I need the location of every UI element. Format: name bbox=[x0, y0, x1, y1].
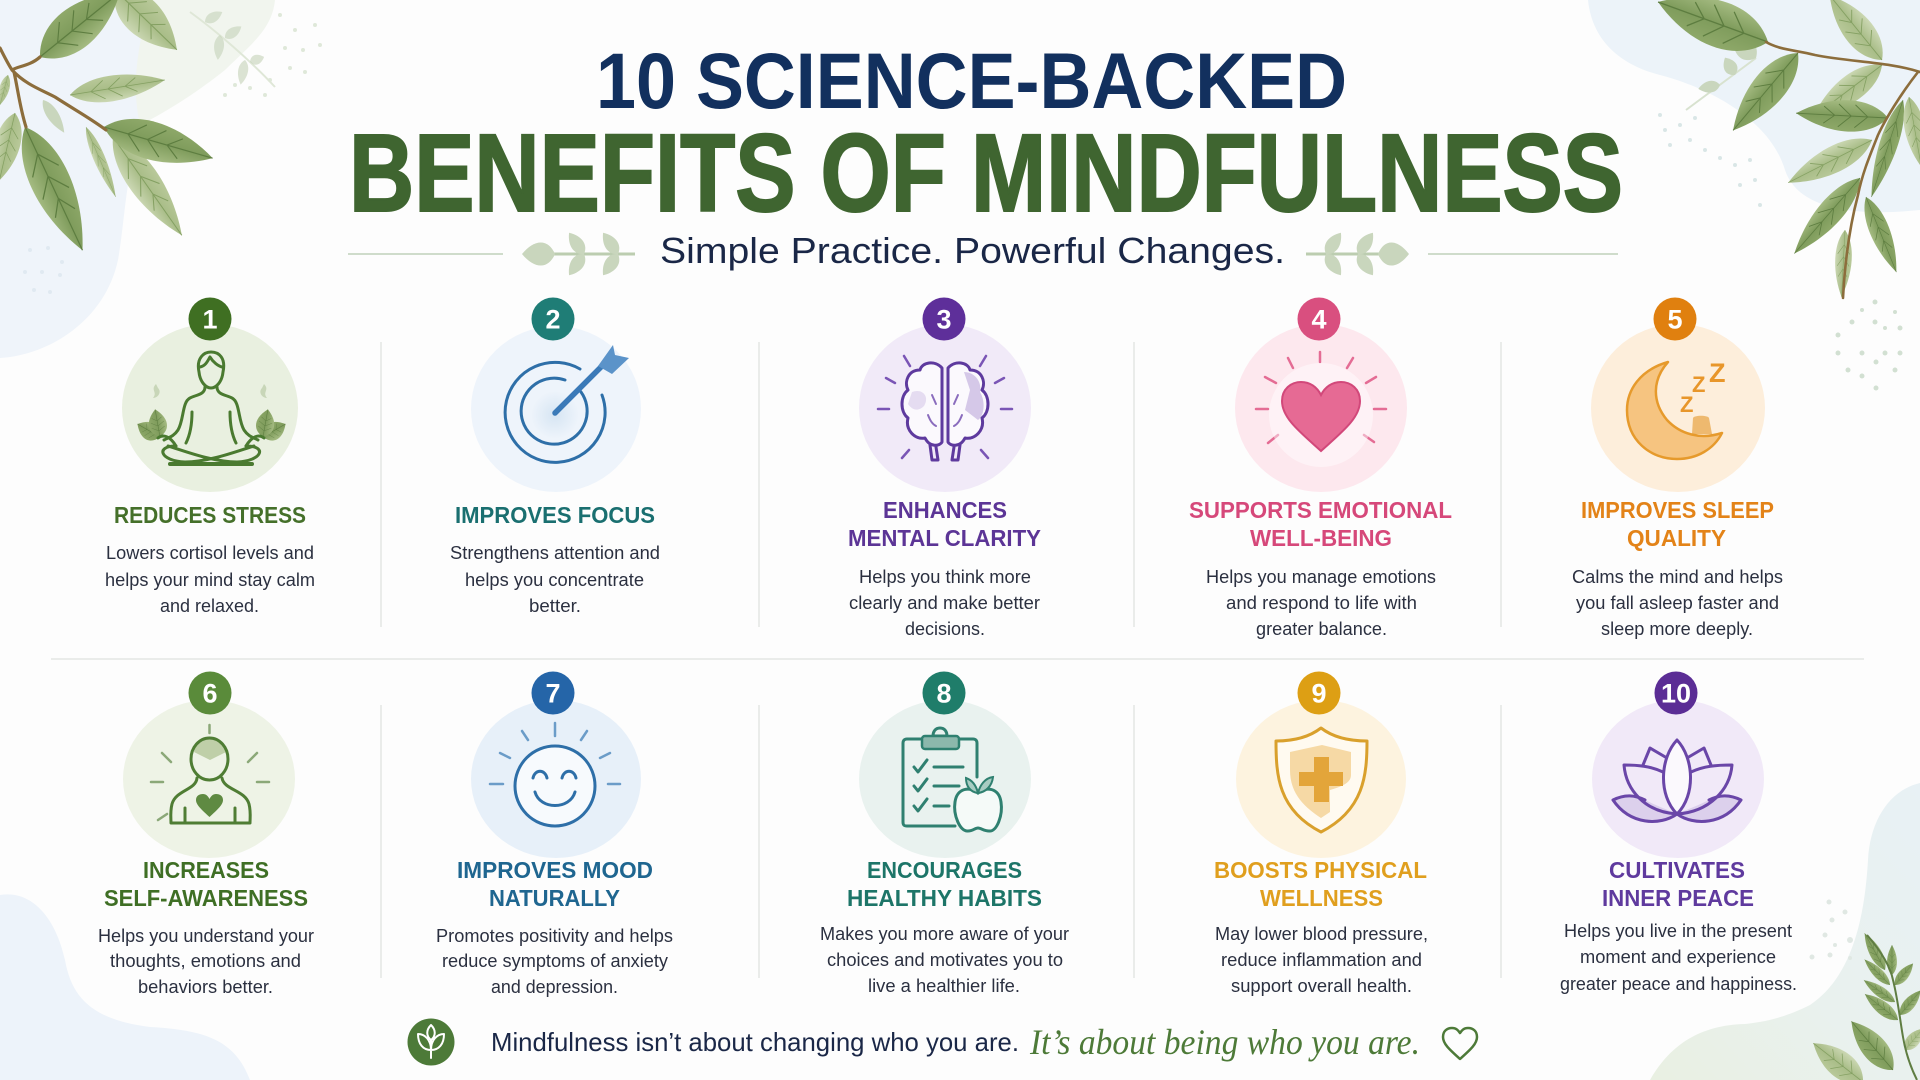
description: Helps you think more bbox=[859, 566, 1031, 587]
heading: NATURALLY bbox=[489, 885, 620, 911]
description bbox=[1206, 566, 1436, 639]
card 8: encourages healthy habits bbox=[820, 672, 1069, 996]
card 9: boosts physical wellness bbox=[1214, 672, 1428, 996]
title: 10 SCIENCE-BACKED bbox=[596, 36, 1347, 125]
heading: WELLNESS bbox=[1260, 885, 1383, 911]
description: live a healthier life. bbox=[868, 975, 1020, 996]
heading bbox=[1602, 857, 1754, 911]
card 10: cultivates inner peace bbox=[1560, 672, 1797, 994]
description: thoughts, emotions and bbox=[110, 950, 301, 971]
heading: REDUCES STRESS bbox=[114, 502, 306, 528]
card 5: improves sleep quality bbox=[1572, 298, 1783, 639]
top-left leaf branch bbox=[0, 0, 218, 259]
description: helps your mind stay calm bbox=[105, 569, 315, 590]
heading: HEALTHY HABITS bbox=[847, 885, 1042, 911]
subtitle with sprigs bbox=[348, 229, 1618, 279]
description: decisions. bbox=[905, 618, 985, 639]
icon: smiling face with rays bbox=[490, 723, 620, 826]
number badge 3: 3 bbox=[936, 304, 952, 334]
description: clearly and make better bbox=[849, 592, 1040, 613]
number badge 5 bbox=[1654, 298, 1696, 340]
icon: glowing heart bbox=[1256, 352, 1386, 467]
heading: SELF-AWARENESS bbox=[104, 885, 308, 911]
icon: meditating person bbox=[133, 352, 290, 464]
description bbox=[436, 925, 673, 997]
icon: clipboard with apple bbox=[903, 728, 1001, 831]
icon: crescent moon with z's bbox=[1627, 358, 1726, 459]
description: behaviors better. bbox=[138, 976, 273, 997]
icon: shield with cross bbox=[1276, 728, 1367, 832]
description bbox=[105, 542, 315, 616]
subtitle with sprigs: Simple Practice. Powerful Changes. bbox=[660, 230, 1285, 271]
description: Helps you live in the present bbox=[1564, 920, 1792, 941]
description: moment and experience bbox=[1580, 946, 1776, 967]
description: sleep more deeply. bbox=[1601, 618, 1753, 639]
description: better. bbox=[529, 595, 581, 616]
heading bbox=[1581, 497, 1774, 551]
description: May lower blood pressure, bbox=[1215, 923, 1428, 944]
description: Calms the mind and helps bbox=[1572, 566, 1783, 587]
heading bbox=[104, 857, 308, 911]
grid dividers bbox=[51, 342, 1864, 978]
description: Helps you manage emotions bbox=[1206, 566, 1436, 587]
icon: lotus flower bbox=[1613, 740, 1741, 821]
description bbox=[1215, 923, 1428, 996]
heading: WELL-BEING bbox=[1250, 525, 1392, 551]
top-right leaf branch bbox=[1650, 0, 1920, 298]
icon: crescent moon with z's: Z bbox=[1680, 392, 1693, 417]
card 3: enhances mental clarity bbox=[848, 298, 1041, 639]
heading: BOOSTS PHYSICAL bbox=[1214, 857, 1427, 883]
description bbox=[1572, 566, 1783, 639]
heading: ENCOURAGES bbox=[867, 857, 1022, 883]
card 4: supports emotional well-being bbox=[1189, 298, 1452, 639]
number badge 5: 5 bbox=[1667, 304, 1683, 334]
description bbox=[450, 542, 660, 616]
description: Strengthens attention and bbox=[450, 542, 660, 563]
description: support overall health. bbox=[1231, 975, 1412, 996]
description: and respond to life with bbox=[1226, 592, 1417, 613]
description: Promotes positivity and helps bbox=[436, 925, 673, 946]
number badge 2: 2 bbox=[545, 304, 561, 334]
quote script: It’s about being who you are. bbox=[1029, 1022, 1420, 1062]
number badge 4 bbox=[1298, 298, 1340, 340]
icon: crescent moon with z's: Z bbox=[1692, 372, 1705, 397]
description: and relaxed. bbox=[160, 595, 259, 616]
description: and depression. bbox=[491, 976, 618, 997]
description: Makes you more aware of your bbox=[820, 923, 1069, 944]
heading: QUALITY bbox=[1627, 525, 1726, 551]
heading bbox=[848, 497, 1041, 551]
title bbox=[349, 36, 1623, 235]
number badge 6: 6 bbox=[202, 678, 218, 708]
icon: person with heart bbox=[151, 725, 269, 823]
description bbox=[98, 925, 314, 997]
heading bbox=[847, 857, 1042, 911]
number badge 7: 7 bbox=[545, 678, 561, 708]
card 1: reduces stress bbox=[105, 298, 315, 616]
card 2: improves focus bbox=[450, 298, 660, 616]
description bbox=[820, 923, 1069, 996]
title: BENEFITS OF MINDFULNESS bbox=[349, 112, 1623, 235]
heading: IMPROVES FOCUS bbox=[455, 502, 655, 528]
number badge 2 bbox=[532, 298, 574, 340]
description: greater balance. bbox=[1256, 618, 1387, 639]
description: choices and motivates you to bbox=[827, 949, 1063, 970]
heading: SUPPORTS EMOTIONAL bbox=[1189, 497, 1452, 523]
heading: IMPROVES MOOD bbox=[457, 857, 653, 883]
icon: crescent moon with z's: Z bbox=[1709, 358, 1726, 388]
quote text: Mindfulness isn’t about changing who you are. bbox=[491, 1027, 1019, 1057]
heading: MENTAL CLARITY bbox=[848, 525, 1041, 551]
description bbox=[849, 566, 1040, 639]
heading bbox=[457, 857, 653, 911]
description: Helps you understand your bbox=[98, 925, 314, 946]
number badge 7 bbox=[532, 672, 574, 714]
description: helps you concentrate bbox=[465, 569, 644, 590]
heading bbox=[1189, 497, 1452, 551]
icon: outline heart bbox=[1443, 1028, 1477, 1059]
bottom-right leaf sprig bbox=[1805, 930, 1920, 1080]
description: you fall asleep faster and bbox=[1576, 592, 1779, 613]
number badge 1 bbox=[188, 298, 232, 340]
description: reduce symptoms of anxiety bbox=[442, 950, 669, 971]
number badge 8: 8 bbox=[936, 678, 952, 708]
number badge 9 bbox=[1298, 672, 1340, 714]
heading: CULTIVATES bbox=[1609, 857, 1745, 883]
heading: ENHANCES bbox=[883, 497, 1007, 523]
heading: INCREASES bbox=[143, 857, 269, 883]
number badge 6 bbox=[188, 672, 232, 714]
number badge 9: 9 bbox=[1311, 678, 1327, 708]
icon: brain with rays bbox=[878, 356, 1012, 460]
footer quote bbox=[408, 1018, 1477, 1066]
icon: sprout badge bbox=[408, 1018, 454, 1066]
description: greater peace and happiness. bbox=[1560, 973, 1797, 994]
number badge 3 bbox=[922, 298, 966, 340]
number badge 4: 4 bbox=[1311, 304, 1327, 334]
heading: INNER PEACE bbox=[1602, 885, 1754, 911]
number badge 8 bbox=[922, 672, 966, 714]
card 7: improves mood naturally bbox=[436, 672, 673, 997]
description bbox=[1560, 920, 1797, 994]
description: Lowers cortisol levels and bbox=[106, 542, 314, 563]
description: reduce inflammation and bbox=[1221, 949, 1422, 970]
icon: target with arrow bbox=[505, 345, 629, 462]
heading bbox=[1214, 857, 1427, 911]
number badge 10: 10 bbox=[1661, 678, 1691, 708]
card 6: increases self-awareness bbox=[98, 672, 314, 997]
number badge 1: 1 bbox=[202, 304, 218, 334]
number badge 10 bbox=[1654, 672, 1698, 714]
heading: IMPROVES SLEEP bbox=[1581, 497, 1774, 523]
